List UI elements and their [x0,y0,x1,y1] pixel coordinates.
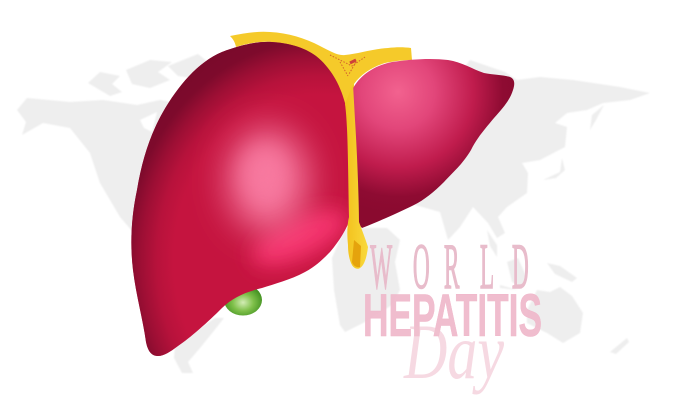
map: Africa [332,228,400,332]
title line: WORLD: D [512,229,529,303]
title: World Hepatitis Day [363,229,542,395]
map: Kamchatka [590,105,604,130]
title line: HEPATITIS: HEPATITIS [363,282,542,349]
liver: red vessel dots [330,55,365,76]
title line: WORLD [370,229,529,303]
liver: ligament fold shadow [352,240,361,267]
title line: Day: Day [403,308,504,395]
liver: falciform ligament top band [230,32,412,130]
liver: left lobe [353,59,514,228]
map: Sumatra and Borneo [487,230,527,290]
world map silhouette [17,54,650,373]
title line: WORLD: R [444,229,460,303]
map: New Zealand [610,338,629,354]
map: Japan [543,158,565,180]
map: North America [17,98,215,232]
title line: WORLD: W [370,229,392,303]
title line: WORLD: O [413,229,430,303]
liver: yellow ligament [345,84,368,269]
liver [120,30,520,370]
map: Eurasia [400,60,650,240]
map: Australia [527,287,583,343]
map: Arctic islands [88,54,208,96]
map: New Guinea [547,263,577,282]
icon: gallbladder [224,284,262,316]
title line: WORLD: L [480,229,494,303]
map: South America [174,318,224,373]
liver: right lobe [131,42,349,356]
